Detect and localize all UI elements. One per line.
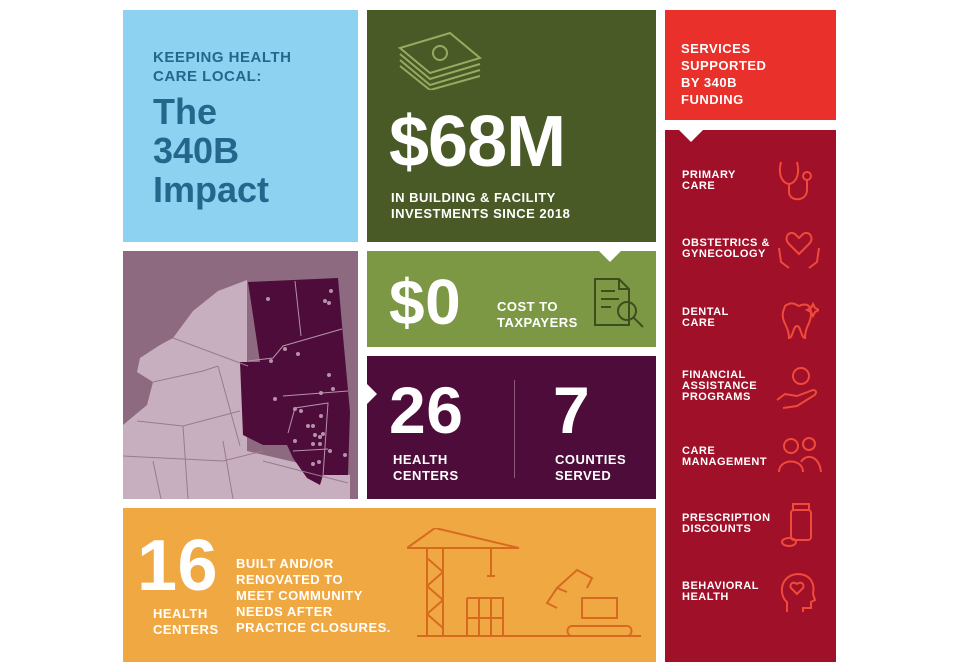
service: care management: MANAGEMENT [682, 456, 767, 468]
icon: tooth [782, 302, 819, 339]
subtitle: CARE LOCAL: [153, 68, 262, 85]
panel: map [123, 251, 358, 499]
caption [391, 190, 570, 221]
caption: PRACTICE CLOSURES. [236, 620, 391, 635]
big number: $0 [389, 266, 461, 338]
stat: 26 health centers [389, 373, 463, 483]
panel: services header: FUNDING [681, 92, 744, 107]
service: prescription [682, 512, 771, 535]
panel: title [123, 10, 358, 242]
service: behavioral [682, 580, 759, 603]
service: care management [682, 445, 767, 468]
service: financial: FINANCIAL [682, 369, 746, 381]
icon: crane and excavator [407, 528, 641, 637]
main title [153, 91, 269, 210]
service: obstetrics: OBSTETRICS & [682, 237, 770, 249]
panel: services header: SERVICES [681, 41, 751, 56]
service: obstetrics: GYNECOLOGY [682, 248, 766, 260]
stat: 7 counties: COUNTIES [555, 452, 626, 467]
icon: money stack [398, 32, 482, 90]
notch [679, 130, 703, 142]
stat: 7 counties: 7 [553, 373, 590, 447]
service: prescription: PRESCRIPTION [682, 512, 771, 524]
icon: pill bottle [781, 503, 812, 547]
stat: 26 health centers: CENTERS [393, 468, 459, 483]
icon: stethoscope [778, 162, 812, 200]
stat: 26 health centers: 26 [389, 373, 463, 447]
service: financial [682, 369, 757, 403]
panel: services header: SUPPORTED [681, 58, 766, 73]
icon: hand coin [776, 367, 817, 409]
big number: 16 [137, 526, 218, 606]
panel: $68M [367, 10, 656, 242]
service: dental: DENTAL [682, 306, 729, 318]
service: primary care [682, 169, 736, 192]
panel: services list [665, 130, 836, 662]
subtitle: KEEPING HEALTH [153, 49, 291, 66]
caption: TAXPAYERS [497, 315, 578, 330]
icon: heart hands [778, 232, 820, 269]
divider [514, 380, 515, 478]
service: behavioral: HEALTH [682, 591, 729, 603]
panel: health centers / counties [367, 356, 656, 499]
notch [599, 251, 621, 262]
caption [236, 556, 391, 635]
caption: RENOVATED TO [236, 572, 343, 587]
service: care management: CARE [682, 445, 715, 457]
icon: document search [594, 278, 644, 328]
caption: COST TO [497, 299, 558, 314]
main title: The [153, 91, 217, 132]
panel: $0 [367, 251, 656, 347]
caption: NEEDS AFTER [236, 604, 333, 619]
icon: head heart [780, 573, 816, 612]
arrow notch [367, 384, 377, 404]
service: obstetrics [682, 237, 770, 260]
service: primary care: CARE [682, 180, 715, 192]
big number: $68M [389, 102, 565, 182]
stat: 26 health centers: HEALTH [393, 452, 448, 467]
subtitle [153, 49, 291, 85]
main title: 340B [153, 130, 239, 171]
caption: BUILT AND/OR [236, 556, 334, 571]
service: behavioral: BEHAVIORAL [682, 580, 759, 592]
service: dental: CARE [682, 317, 715, 329]
map [123, 278, 350, 499]
panel: 16 health centers [123, 508, 656, 662]
stat: 7 counties [553, 373, 626, 483]
icon: people [778, 437, 822, 472]
panel: services header [665, 10, 836, 120]
service: dental [682, 306, 729, 329]
panel: 16 health centers: HEALTH [153, 606, 208, 621]
panel: services header: BY 340B [681, 75, 737, 90]
caption: IN BUILDING & FACILITY [391, 190, 556, 205]
service: financial: PROGRAMS [682, 391, 751, 403]
caption: INVESTMENTS SINCE 2018 [391, 206, 570, 221]
caption: MEET COMMUNITY [236, 588, 363, 603]
caption [497, 299, 578, 330]
main title: Impact [153, 169, 269, 210]
panel: 16 health centers: CENTERS [153, 622, 219, 637]
service: primary care: PRIMARY [682, 169, 736, 181]
stat: 7 counties: SERVED [555, 468, 611, 483]
service: financial: ASSISTANCE [682, 380, 757, 392]
service: prescription: DISCOUNTS [682, 523, 751, 535]
